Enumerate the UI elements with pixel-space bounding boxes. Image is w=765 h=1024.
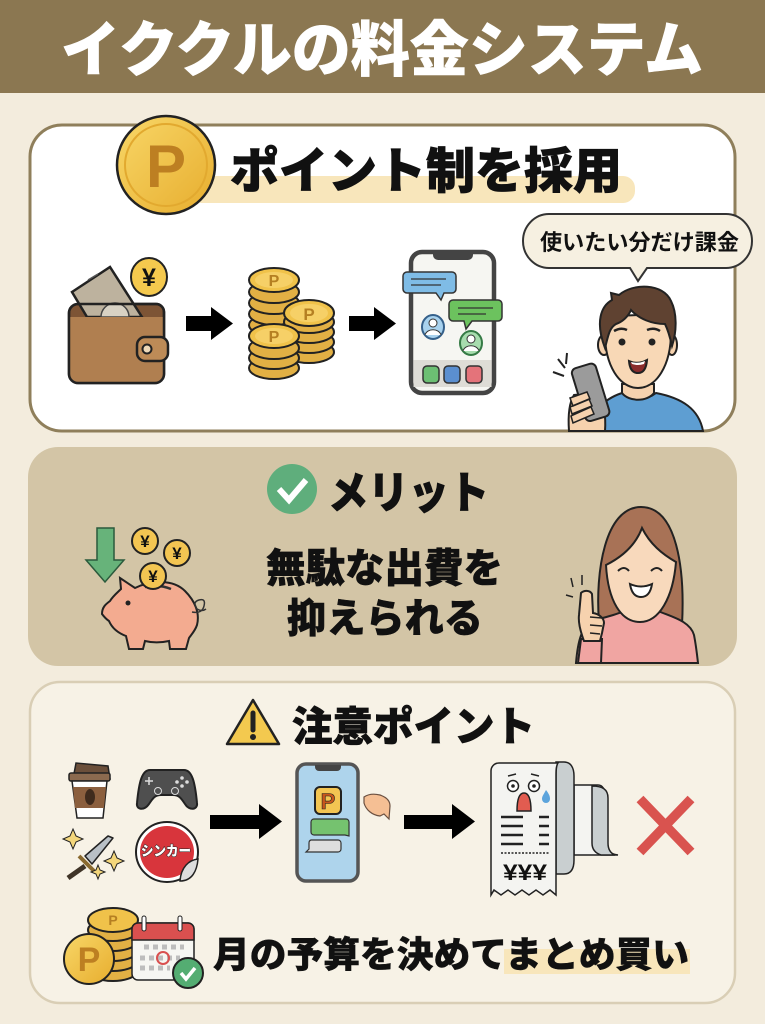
icon: wallet with cash and yen coin: ¥ bbox=[142, 264, 156, 292]
budget message: 月の予算を決めてまとめ買い bbox=[213, 934, 689, 975]
speech bubble: 使いたい分だけ課金 bbox=[540, 230, 739, 255]
panel: merit bbox=[28, 447, 737, 666]
heading: merit: メリット bbox=[328, 469, 489, 518]
icon: coins and calendar: P bbox=[108, 912, 118, 928]
icon: stacks of coins bbox=[249, 268, 334, 379]
icon: coffee cup bbox=[69, 763, 110, 818]
icon: gold P coin: P bbox=[146, 133, 186, 200]
man with smartphone bbox=[553, 287, 703, 431]
icon: wallet with cash and yen coin bbox=[69, 258, 168, 383]
icon: coins and calendar bbox=[64, 908, 203, 988]
icon: stacks of coins: P bbox=[269, 273, 280, 290]
icon: red cross bbox=[640, 799, 691, 852]
icon: coins and calendar: P bbox=[78, 941, 100, 979]
icon: tapping hand bbox=[364, 794, 390, 819]
icon: long receipt with shocked face bbox=[491, 762, 618, 895]
arrow bbox=[404, 804, 475, 839]
icon: piggy bank with coins and down arrow bbox=[86, 528, 206, 649]
heading: point system: ポイント制を採用 bbox=[230, 145, 622, 199]
merit text bbox=[266, 547, 503, 641]
icon: sticker: シンカー bbox=[141, 843, 191, 859]
panel: point system bbox=[30, 116, 752, 431]
arrow bbox=[210, 804, 282, 839]
arrow bbox=[186, 307, 233, 340]
icon: phone with P app: P bbox=[321, 789, 335, 814]
icon: piggy bank with coins and down arrow: ¥ bbox=[148, 567, 158, 586]
speech bubble bbox=[523, 214, 752, 281]
icon: gold P coin bbox=[117, 116, 215, 214]
woman giving thumbs up bbox=[566, 507, 698, 663]
icon: sword with sparkles bbox=[63, 829, 124, 879]
panel: caution bbox=[30, 682, 735, 1003]
icon: smartphone with chat bubbles bbox=[403, 252, 502, 393]
icon: green check bbox=[267, 464, 317, 514]
icon: game controller bbox=[137, 770, 197, 809]
heading: caution: 注意ポイント bbox=[292, 704, 535, 750]
icon: warning triangle bbox=[227, 700, 279, 744]
icon: stacks of coins: P bbox=[303, 305, 315, 324]
arrow bbox=[349, 307, 396, 340]
icon: long receipt with shocked face: ¥¥¥ bbox=[503, 860, 548, 885]
icon: sticker bbox=[136, 822, 198, 882]
title banner bbox=[0, 0, 765, 93]
icon: stacks of coins: P bbox=[269, 329, 280, 346]
icon: piggy bank with coins and down arrow: ¥ bbox=[140, 532, 150, 551]
icon: piggy bank with coins and down arrow: ¥ bbox=[172, 544, 182, 563]
merit text: 無駄な出費を bbox=[266, 547, 503, 591]
merit text: 抑えられる bbox=[287, 597, 483, 641]
title banner: イククルの料金システム bbox=[61, 17, 703, 84]
icon: phone with P app bbox=[297, 764, 358, 881]
